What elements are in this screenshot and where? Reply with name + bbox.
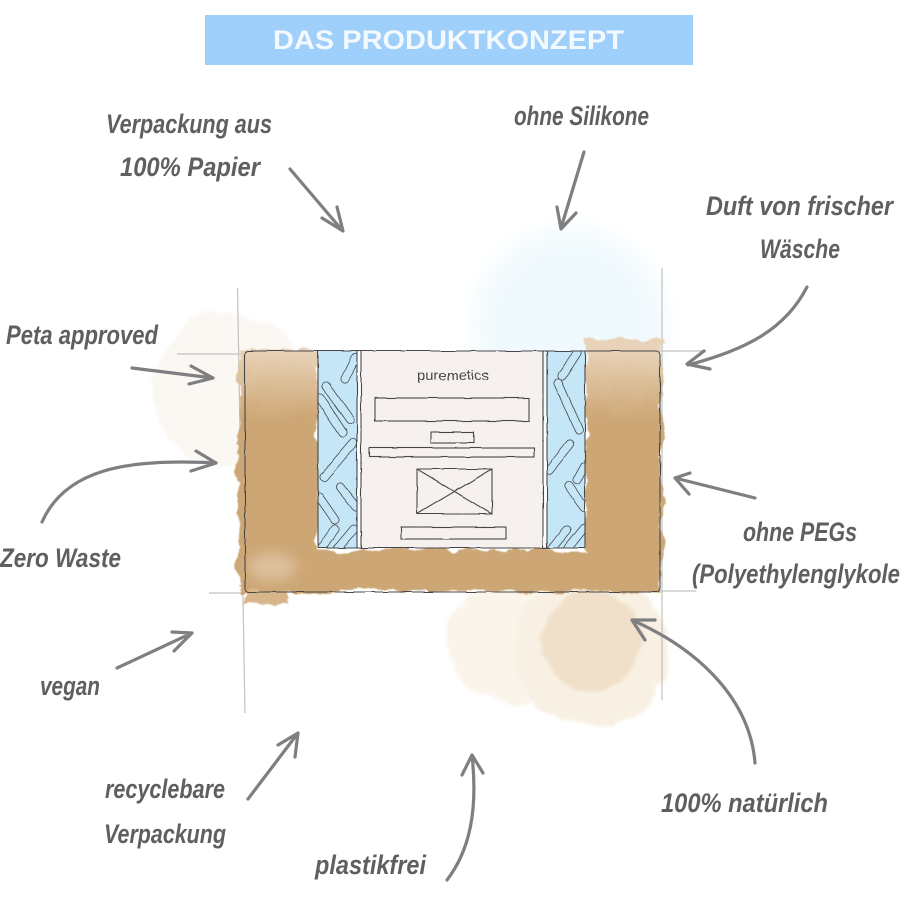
label: Verpackung aus 100% Papier: 100% Papier bbox=[120, 152, 261, 182]
arrow: Verpackung bbox=[290, 169, 343, 231]
label: Duft von frischer Waesche: Wäsche bbox=[760, 234, 840, 264]
arrow: ohne PEGs bbox=[675, 473, 755, 498]
label: recyclebare Verpackung: recyclebare bbox=[105, 774, 225, 804]
left strip pattern bbox=[319, 358, 356, 548]
label: Verpackung aus 100% Papier: Verpackung aus bbox=[106, 109, 272, 139]
label placeholder boxes bbox=[369, 398, 534, 539]
title banner bbox=[205, 15, 693, 65]
blue side strips bbox=[318, 351, 585, 548]
label: Verpackung aus 100% Papier bbox=[106, 109, 272, 182]
label: ohne PEGs (Polyethylenglykole bbox=[692, 517, 900, 589]
arrow: recyclebare bbox=[248, 733, 298, 799]
label: plastikfrei: plastikfrei bbox=[314, 850, 426, 880]
package outline bbox=[245, 351, 660, 592]
arrow: vegan bbox=[117, 632, 192, 668]
label: vegan: vegan bbox=[40, 671, 100, 701]
label: Peta approved: Peta approved bbox=[6, 320, 158, 350]
brand name: puremetics bbox=[417, 367, 489, 383]
arrow: Peta approved bbox=[132, 366, 213, 384]
crop marks bbox=[177, 268, 706, 713]
label: 100% natuerlich: 100% natürlich bbox=[661, 788, 828, 818]
central label bbox=[361, 351, 543, 548]
label: recyclebare Verpackung: Verpackung bbox=[104, 819, 226, 849]
arrow: Duft bbox=[687, 287, 807, 369]
arrow: Zero Waste bbox=[42, 451, 216, 522]
right strip pattern bbox=[549, 353, 584, 548]
label: Duft von frischer Waesche bbox=[706, 191, 894, 264]
label: Zero Waste: Zero Waste bbox=[0, 543, 121, 573]
arrow: plastikfrei bbox=[447, 755, 483, 880]
label: ohne PEGs (Polyethylenglykole: ohne PEGs bbox=[743, 517, 857, 547]
brown paper packaging fill bbox=[239, 340, 662, 606]
product sketch bbox=[245, 351, 660, 592]
label: ohne Silikone: ohne Silikone bbox=[514, 101, 649, 131]
title banner: DAS PRODUKTKONZEPT bbox=[273, 25, 625, 55]
arrow: 100% natuerlich bbox=[632, 620, 755, 763]
watercolor blots behind the product bbox=[152, 230, 670, 728]
pale patch on the packaging bbox=[248, 553, 296, 581]
strip and label rules bbox=[318, 351, 585, 548]
image placeholder bbox=[417, 469, 492, 514]
arrow: ohne Silikone bbox=[557, 152, 584, 229]
label: recyclebare Verpackung bbox=[104, 774, 226, 849]
